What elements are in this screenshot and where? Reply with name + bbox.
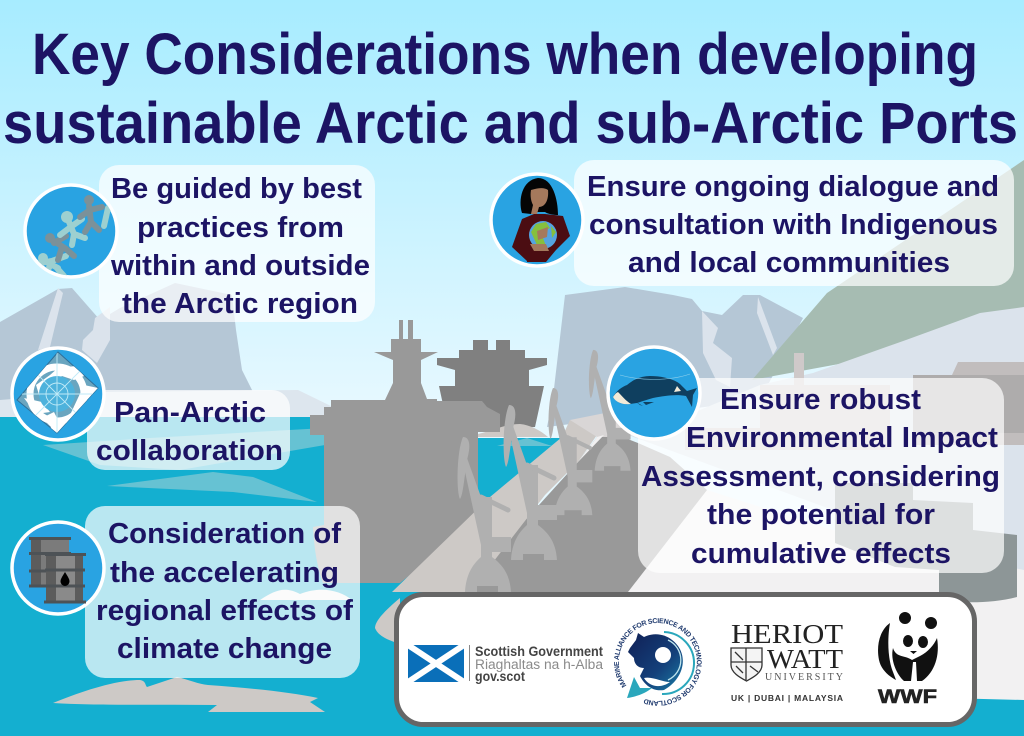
quay block — [570, 412, 628, 437]
wordmark heriot: HERIOT — [731, 619, 844, 649]
panel background — [85, 506, 360, 678]
seal body — [628, 633, 683, 690]
campuses: UK | DUBAI | MALAYSIA — [731, 693, 843, 703]
logo: Scottish Government — [408, 644, 603, 684]
logo: Heriot-Watt — [731, 619, 844, 703]
panel text — [96, 518, 353, 665]
hair — [521, 178, 558, 215]
small central island — [478, 424, 548, 437]
eye ring — [655, 647, 671, 663]
panel text: Environmental Impact — [686, 422, 998, 454]
sea — [0, 417, 562, 736]
title — [3, 22, 1018, 156]
panel background — [638, 378, 1004, 573]
panda body — [892, 638, 938, 681]
panel text — [110, 173, 370, 320]
shield — [731, 648, 762, 681]
panel text: practices from — [137, 212, 344, 244]
panel text — [641, 384, 1000, 570]
panel text: Ensure robust — [720, 384, 921, 416]
quay grey ground — [460, 436, 707, 592]
icon: person holding earth — [491, 174, 583, 266]
panel: environmental impact — [608, 347, 1004, 573]
logo: Marine Alliance — [614, 618, 702, 706]
panel text: Assessment, considering — [641, 461, 1000, 493]
crane three — [549, 388, 592, 515]
crane two — [504, 405, 557, 560]
light swirl — [668, 640, 681, 680]
panel text: the Arctic region — [122, 288, 358, 320]
pale snow slope — [620, 307, 1024, 580]
panda eyes and nose — [903, 635, 928, 654]
centre mountain snow — [702, 297, 777, 387]
divider — [468, 645, 470, 681]
drifting ice — [43, 428, 325, 502]
panda left shoulder — [878, 623, 896, 680]
panel text — [96, 397, 283, 467]
crane one — [458, 437, 511, 592]
crane four — [589, 350, 631, 471]
hands — [530, 227, 549, 251]
panel background — [87, 390, 290, 470]
wordmark university: UNIVERSITY — [765, 672, 843, 683]
panel background — [574, 160, 1014, 286]
rear ship — [437, 340, 547, 430]
panel text: Be guided by best — [111, 173, 362, 205]
wordmark — [475, 644, 603, 684]
ring text: MARINE ALLIANCE FOR SCIENCE AND TECHNOLOGY FOR SCOTLAND — [614, 618, 702, 706]
panel text: consultation with Indigenous — [589, 209, 998, 241]
earth — [529, 221, 557, 249]
panel text: within and outside — [110, 250, 370, 282]
panel: climate change — [12, 506, 360, 678]
panel: partner logos — [394, 592, 977, 727]
icon: arctic map — [12, 348, 104, 440]
shore snow — [260, 590, 352, 600]
white shore light — [578, 435, 604, 462]
panel text: climate change — [117, 633, 332, 665]
panel text: Ensure ongoing dialogue and — [587, 171, 999, 203]
warehouse front — [913, 375, 1024, 433]
beach left of logos — [375, 598, 400, 644]
front ship — [310, 320, 500, 583]
port buildings — [685, 353, 890, 450]
green hillside — [752, 160, 1024, 380]
panda ears — [899, 612, 937, 629]
panel text — [587, 171, 999, 279]
left ice shelf — [0, 390, 335, 425]
panel text: and local communities — [628, 247, 950, 279]
panel text: regional effects of — [96, 595, 353, 627]
panel text: cumulative effects — [691, 538, 951, 570]
sweater — [512, 214, 570, 262]
icon: whale — [608, 347, 700, 439]
panel text: the potential for — [707, 499, 935, 531]
warehouse — [913, 362, 1024, 445]
saltire — [408, 645, 464, 682]
white belly swoosh — [644, 678, 670, 686]
panel text: Pan-Arctic — [114, 397, 266, 429]
central drift ice — [497, 438, 552, 446]
panel: best practices — [25, 165, 375, 322]
wordmark: WWF — [878, 687, 937, 708]
teal swirl — [662, 632, 694, 694]
face — [531, 188, 548, 214]
wordmark: gov.scot — [475, 669, 525, 684]
wordmark watt: WATT — [767, 644, 844, 674]
logo: WWF — [878, 612, 938, 708]
wordmark: Scottish Government — [475, 644, 603, 659]
left mountain — [0, 283, 258, 402]
panel: pan-arctic — [12, 348, 290, 470]
panel text: the accelerating — [110, 557, 339, 589]
icon: people holding hands — [25, 185, 117, 277]
quay — [392, 420, 597, 592]
panel text: Consideration of — [108, 518, 341, 550]
storage tanks — [835, 483, 1017, 602]
panel background — [99, 165, 375, 322]
panel text: collaboration — [96, 435, 283, 467]
panel: dialogue — [491, 160, 1014, 286]
icon: oil barrels — [12, 522, 104, 614]
snowy ground — [600, 438, 1024, 736]
small island — [53, 677, 325, 712]
tail — [627, 677, 652, 698]
centre mountain — [547, 287, 803, 427]
left mountain snow — [38, 288, 110, 363]
wordmark: Riaghaltas na h-Alba — [475, 657, 603, 672]
sea bottom strip — [390, 698, 1024, 736]
logo panel background — [396, 594, 974, 724]
